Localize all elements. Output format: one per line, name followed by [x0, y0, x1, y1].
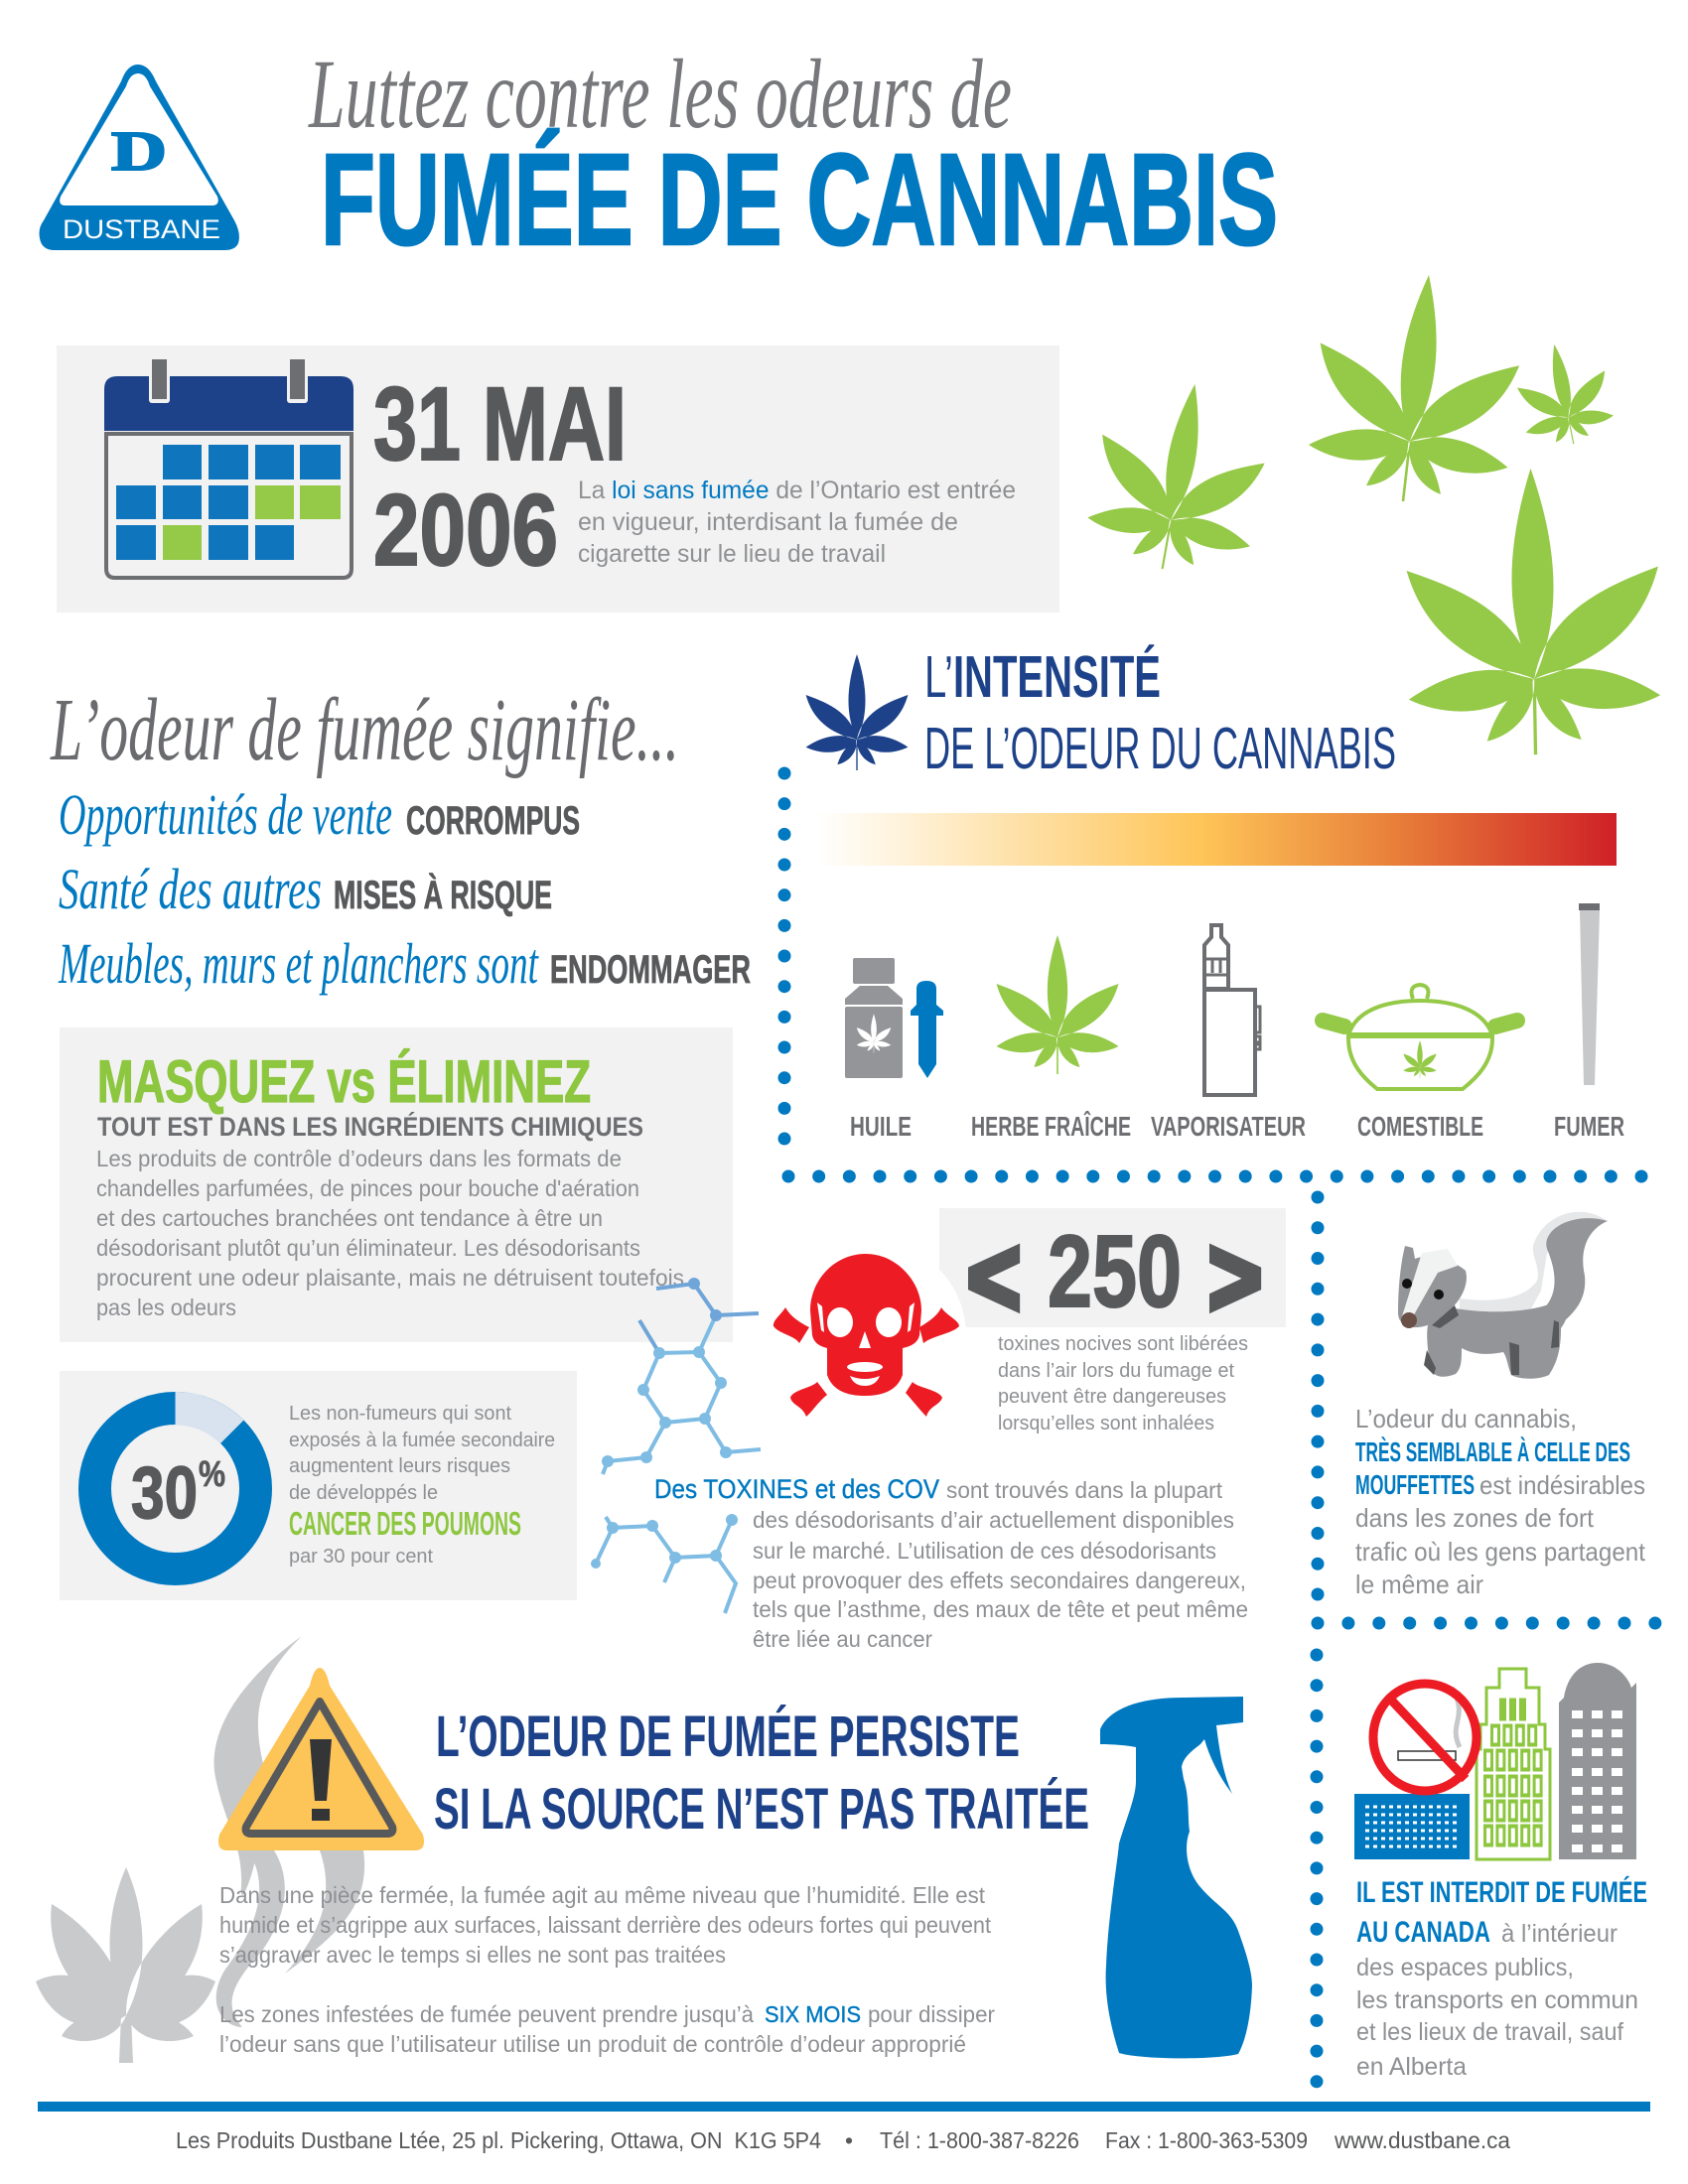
number: 250: 250 [1048, 1214, 1182, 1328]
labels: sources d'odeur: HERBE FRAÎCHE [971, 1111, 1131, 1142]
text: toxines et cov: peut provoquer des effets secondaires dangereux, [753, 1568, 1246, 1593]
title: Luttez contre les odeurs de [308, 39, 1012, 149]
text: la fumée persiste: Les zones infestées de fumée peuvent prendre jusqu’à [219, 2001, 754, 2027]
icon: green cannabis leaf 2 [1304, 264, 1528, 512]
icon: green cannabis leaf 1 [1081, 370, 1276, 583]
text: la fumée persiste: SIX MOIS [765, 2001, 861, 2027]
text: la fumée persiste: s’aggraver avec le temps si elles ne sont pas traitées [219, 1942, 726, 1968]
icon: grey cannabis leaf [36, 1867, 215, 2063]
text: toxines et cov [654, 1474, 1248, 1652]
text: la fumée persiste: l’odeur sans que l’utilisateur utilise un produit de contrôle d’odeur approprié [219, 2031, 966, 2057]
icon: molecule 2 [591, 1514, 738, 1613]
text: ingrédients: et des cartouches branchées ont tendance à être un [96, 1205, 603, 1231]
icon: spray bottle [1100, 1697, 1252, 2058]
text: mouffettes: MOUFFETTES [1355, 1469, 1475, 1500]
text: ingrédients [96, 1146, 684, 1320]
panel: masquez vs éliminez [60, 1027, 733, 1342]
footer contact: Fax : 1-800-363-5309 [1105, 2127, 1308, 2153]
text: toxines nocives: peuvent être dangereuses [998, 1386, 1226, 1408]
icon: blue building [1354, 1794, 1470, 1859]
text: cancer des poumons [289, 1403, 555, 1568]
text: interdit de fumée au canada: en Alberta [1356, 2053, 1467, 2081]
number: 250: > [1208, 1215, 1262, 1339]
heading: l'intensité de l'odeur du cannabis: DE L’ODEUR DU CANNABIS [924, 716, 1396, 781]
logo: Dustbane [40, 65, 239, 250]
panel: date 31 mai 2006 [57, 345, 1059, 613]
list: conséquences: Santé des autres [59, 857, 322, 921]
icon: molecule 1 [602, 1278, 761, 1474]
text: interdit de fumée au canada: les transports en commun [1356, 1986, 1638, 2014]
text: toxines nocives: toxines nocives sont libérées [998, 1333, 1248, 1355]
icon: huile [845, 958, 943, 1078]
list: conséquences: MISES À RISQUE [334, 873, 552, 917]
icon: green cannabis leaf 4 [1405, 467, 1661, 756]
icon: green building [1477, 1669, 1550, 1859]
icon: herbe fraîche [997, 935, 1118, 1074]
text: mouffettes: dans les zones de fort [1355, 1503, 1595, 1533]
icon: vaporisateur [1204, 925, 1260, 1095]
text: la fumée persiste: Dans une pièce fermée, la fumée agit au même niveau que l’humidité. Elle est [219, 1882, 986, 1908]
text: toxines et cov: être liée au cancer [753, 1626, 932, 1652]
text: mouffettes: trafic où les gens partagent [1355, 1537, 1646, 1567]
footer contact [176, 2127, 1510, 2153]
text: la fumée persiste: pour dissiper [868, 2001, 995, 2027]
logo: Dustbane: DUSTBANE [63, 214, 220, 244]
text: toxines et cov: tels que l’asthme, des maux de tête et peut même [753, 1596, 1248, 1622]
heading: l'intensité de l'odeur du cannabis: L’INTENSITÉ [924, 644, 1161, 710]
chart: donut 30%: 30 [131, 1451, 198, 1534]
text: interdit de fumée au canada: AU CANADA [1356, 1916, 1490, 1949]
text: cancer des poumons: par 30 pour cent [289, 1546, 433, 1568]
heading: l'odeur de fumée persiste: L’ODEUR DE FUMÉE PERSISTE [436, 1705, 1020, 1769]
icon: warning triangle [218, 1668, 424, 1850]
subheading: TOUT EST DANS LES INGRÉDIENTS CHIMIQUES [97, 1111, 643, 1142]
list: conséquences [58, 782, 751, 996]
text: ingrédients: chandelles parfumées, de pinces pour bouche d'aération [96, 1175, 639, 1201]
icon: interdit de fumer and buildings [1354, 1663, 1636, 1859]
list: conséquences: ENDOMMAGER [550, 948, 751, 992]
chart: donut 30% [95, 1392, 256, 1569]
text: interdit de fumée au canada: à l’intérieur [1501, 1920, 1618, 1948]
text: mouffettes: L’odeur du cannabis, [1355, 1404, 1577, 1433]
text: mouffettes [1355, 1404, 1646, 1599]
date text: 2006 [373, 474, 558, 587]
text: loi sans fumée: cigarette sur le lieu de travail [578, 540, 886, 568]
list: conséquences: Meubles, murs et planchers sont [58, 931, 539, 996]
footer contact: www.dustbane.ca [1334, 2127, 1510, 2153]
footer contact: Tél : 1-800-387-8226 [880, 2127, 1079, 2153]
icon: green cannabis leaf 3 [1510, 336, 1618, 453]
chart: donut 30%: % [199, 1453, 225, 1494]
icon: calendar [104, 359, 353, 578]
icon: grey building [1559, 1663, 1636, 1859]
date text: 31 MAI [373, 366, 627, 482]
text: toxines nocives: dans l’air lors du fumage et [998, 1360, 1234, 1382]
text: toxines et cov: sur le marché. L’utilisation de ces désodorisants [753, 1538, 1216, 1564]
text: loi sans fumée: La loi sans fumée de l’Ontario est entrée [578, 477, 1016, 504]
title [308, 39, 1278, 272]
text: mouffettes: le même air [1355, 1570, 1483, 1599]
text: loi sans fumée: en vigueur, interdisant la fumée de [578, 508, 958, 536]
icon: skunk [1398, 1212, 1608, 1379]
text: interdit de fumée au canada [1356, 1875, 1647, 2081]
text: la fumée persiste: humide et s’agrippe aux surfaces, laissant derrière des odeurs fortes qui peuvent [219, 1912, 992, 1938]
icon: dark blue cannabis leaf [806, 654, 908, 770]
text: toxines et cov: sont trouvés dans la plupart [946, 1477, 1223, 1503]
labels: sources d'odeur: HUILE [850, 1111, 912, 1142]
text: la fumée persiste [219, 1882, 995, 2057]
title: FUMÉE DE CANNABIS [321, 126, 1278, 272]
heading: l'odeur de fumée persiste: SI LA SOURCE N’EST PAS TRAITÉE [434, 1777, 1089, 1842]
text: cancer des poumons: de développés le [289, 1482, 438, 1504]
heading: l'intensité de l'odeur du cannabis [924, 644, 1396, 781]
text: cancer des poumons: augmentent leurs risques [289, 1455, 510, 1477]
text: toxines nocives [998, 1333, 1248, 1434]
text: toxines et cov: des désodorisants d’air actuellement disponibles [753, 1507, 1234, 1533]
list: conséquences: Opportunités de vente [59, 782, 392, 847]
heading: l'odeur de fumée persiste [434, 1705, 1089, 1842]
number: 250 [967, 1214, 1262, 1339]
icon: no smoking sign [1373, 1684, 1477, 1791]
text: loi sans fumée [578, 477, 1016, 568]
icon: skull and crossbones [774, 1254, 959, 1417]
text: ingrédients: Les produits de contrôle d’odeurs dans les formats de [96, 1146, 622, 1171]
icon: comestible [1323, 985, 1517, 1089]
labels: sources d'odeur: COMESTIBLE [1357, 1111, 1483, 1142]
panel: 250 toxines [939, 1208, 1286, 1339]
date text [373, 366, 627, 587]
text: interdit de fumée au canada: et les lieux de travail, sauf [1356, 2018, 1623, 2046]
logo: Dustbane: D [111, 121, 167, 183]
text: toxines nocives: lorsqu’elles sont inhalées [998, 1413, 1214, 1434]
text: ingrédients: procurent une odeur plaisante, mais ne détruisent toutefois [96, 1265, 684, 1291]
labels: sources d'odeur: FUMER [1554, 1111, 1624, 1142]
heading: masquez vs éliminez: MASQUEZ vs ÉLIMINEZ [97, 1048, 591, 1115]
heading: l'odeur de fumée signifie: L’odeur de fumée signifie... [50, 681, 679, 779]
footer contact: • [845, 2127, 853, 2153]
text: ingrédients: pas les odeurs [96, 1295, 236, 1320]
footer contact: Les Produits Dustbane Ltée, 25 pl. Pickering, Ottawa, ON K1G 5P4 [176, 2127, 821, 2153]
list: conséquences: CORROMPUS [406, 799, 580, 843]
footer bar [38, 2102, 1650, 2112]
decoration: smoke swirls [214, 1636, 364, 2027]
text: cancer des poumons: exposés à la fumée secondaire [289, 1430, 555, 1451]
text: interdit de fumée au canada: des espaces publics, [1356, 1954, 1574, 1981]
panel: 30 pour cent [60, 1371, 577, 1600]
icon: fumer [1579, 903, 1600, 1085]
text: cancer des poumons: CANCER DES POUMONS [289, 1505, 521, 1542]
text: mouffettes: est indésirables [1479, 1470, 1645, 1500]
labels: sources d'odeur: VAPORISATEUR [1151, 1111, 1306, 1142]
chart: intensity gradient bar [817, 813, 1617, 866]
text: ingrédients: désodorisant plutôt qu’un éliminateur. Les désodorisants [96, 1235, 640, 1261]
number: 250: < [967, 1215, 1021, 1339]
dotted dividers [784, 773, 1656, 2083]
text: toxines et cov: Des TOXINES et des COV [654, 1474, 939, 1504]
labels: sources d'odeur [850, 1111, 1624, 1142]
text: cancer des poumons: Les non-fumeurs qui sont [289, 1403, 511, 1425]
